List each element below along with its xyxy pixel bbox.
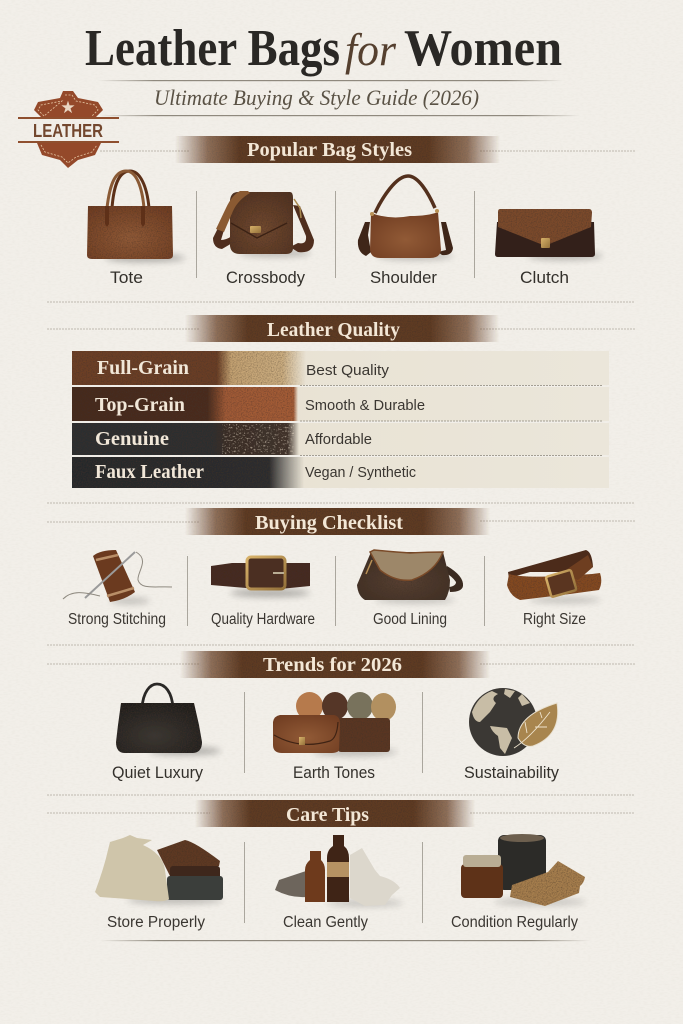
label: clean gently: Clean Gently xyxy=(283,914,368,931)
heading: popular bag styles: Popular Bag Styles xyxy=(247,139,412,161)
column dividers xyxy=(196,191,474,278)
heading: leather quality: Leather Quality xyxy=(267,319,400,341)
label: condition regularly: Condition Regularly xyxy=(451,914,578,931)
icon: cleaning bottles and cloth xyxy=(275,835,403,906)
icon: globe with leaf xyxy=(469,688,558,756)
row: genuine: Genuine xyxy=(95,428,169,450)
label: earth tones: Earth Tones xyxy=(293,763,375,782)
label: store properly: Store Properly xyxy=(107,914,205,931)
row: top-grain: Top-Grain xyxy=(95,394,185,416)
title rule xyxy=(98,80,562,81)
divider lines xyxy=(47,645,635,664)
title xyxy=(85,20,562,77)
divider line xyxy=(100,150,635,152)
section: trends for 2026 xyxy=(47,645,635,782)
label: right size: Right Size xyxy=(523,611,586,628)
icon: lined bag xyxy=(357,550,463,603)
icon: stitching xyxy=(63,550,172,604)
row: full-grain: Full-Grain xyxy=(97,357,189,379)
icon: crossbody bag xyxy=(213,191,314,257)
label: quiet luxury: Quiet Luxury xyxy=(112,763,203,782)
row: faux leather: Faux Leather xyxy=(95,461,204,483)
heading: buying checklist: Buying Checklist xyxy=(255,512,403,534)
quality table xyxy=(72,351,609,488)
label: tote: Tote xyxy=(110,268,143,287)
icon: shoulder bag xyxy=(358,176,453,260)
icon: storage bag and leather xyxy=(95,835,223,904)
heading: trends for 2026 xyxy=(180,651,490,678)
row: full-grain xyxy=(72,351,609,385)
column dividers xyxy=(244,842,422,923)
label: clutch: Clutch xyxy=(520,268,569,287)
row: genuine: Affordable xyxy=(305,431,372,448)
icon: belt buckle xyxy=(211,557,310,597)
badge star: ★ xyxy=(60,98,76,118)
badge label: LEATHER xyxy=(33,121,103,141)
icon: black handbag xyxy=(116,684,221,755)
icon: coiled belt xyxy=(507,550,601,603)
label: good lining: Good Lining xyxy=(373,611,447,628)
heading: buying checklist xyxy=(185,508,490,535)
row: faux leather xyxy=(72,457,609,488)
row: full-grain: Best Quality xyxy=(306,362,390,379)
icon: earth tone swatches and pouches xyxy=(273,692,397,756)
divider lines xyxy=(47,503,635,522)
icon: clutch bag xyxy=(495,209,603,260)
label: quality hardware: Quality Hardware xyxy=(211,611,315,628)
label: strong stitching: Strong Stitching xyxy=(68,611,166,628)
section: care tips xyxy=(47,795,635,931)
row: faux leather: Vegan / Synthetic xyxy=(305,464,416,481)
heading: leather quality xyxy=(185,315,499,342)
column dividers xyxy=(188,556,484,626)
heading: care tips xyxy=(195,800,475,827)
heading: care tips: Care Tips xyxy=(286,804,369,826)
heading: popular bag styles xyxy=(175,136,500,163)
title: Leather Bags xyxy=(85,20,340,77)
row: top-grain: Smooth & Durable xyxy=(305,397,425,414)
row: top-grain xyxy=(72,387,609,421)
badge lines xyxy=(18,118,119,142)
subtitle rule xyxy=(100,115,580,116)
label: crossbody: Crossbody xyxy=(226,268,305,287)
heading: trends for 2026: Trends for 2026 xyxy=(263,654,402,676)
section: buying checklist xyxy=(47,503,635,628)
label: sustainability: Sustainability xyxy=(464,763,559,782)
row separators xyxy=(300,386,602,456)
divider lines xyxy=(47,302,635,329)
badge stitching xyxy=(38,95,98,163)
badge top xyxy=(34,91,103,118)
section: leather quality xyxy=(47,302,635,488)
icon: tote bag xyxy=(87,171,185,262)
column dividers xyxy=(244,692,422,773)
icon: conditioner jars and cloth xyxy=(461,834,586,906)
divider lines xyxy=(47,795,635,813)
badge bottom xyxy=(37,143,101,168)
subtitle: Ultimate Buying & Style Guide (2026) xyxy=(154,85,479,110)
section: popular bag styles xyxy=(87,136,635,287)
title: for xyxy=(345,24,397,75)
label: shoulder: Shoulder xyxy=(370,268,437,287)
row: genuine xyxy=(72,423,609,455)
bottom rule xyxy=(100,940,590,941)
title: Women xyxy=(404,20,562,77)
leather badge xyxy=(18,91,119,168)
